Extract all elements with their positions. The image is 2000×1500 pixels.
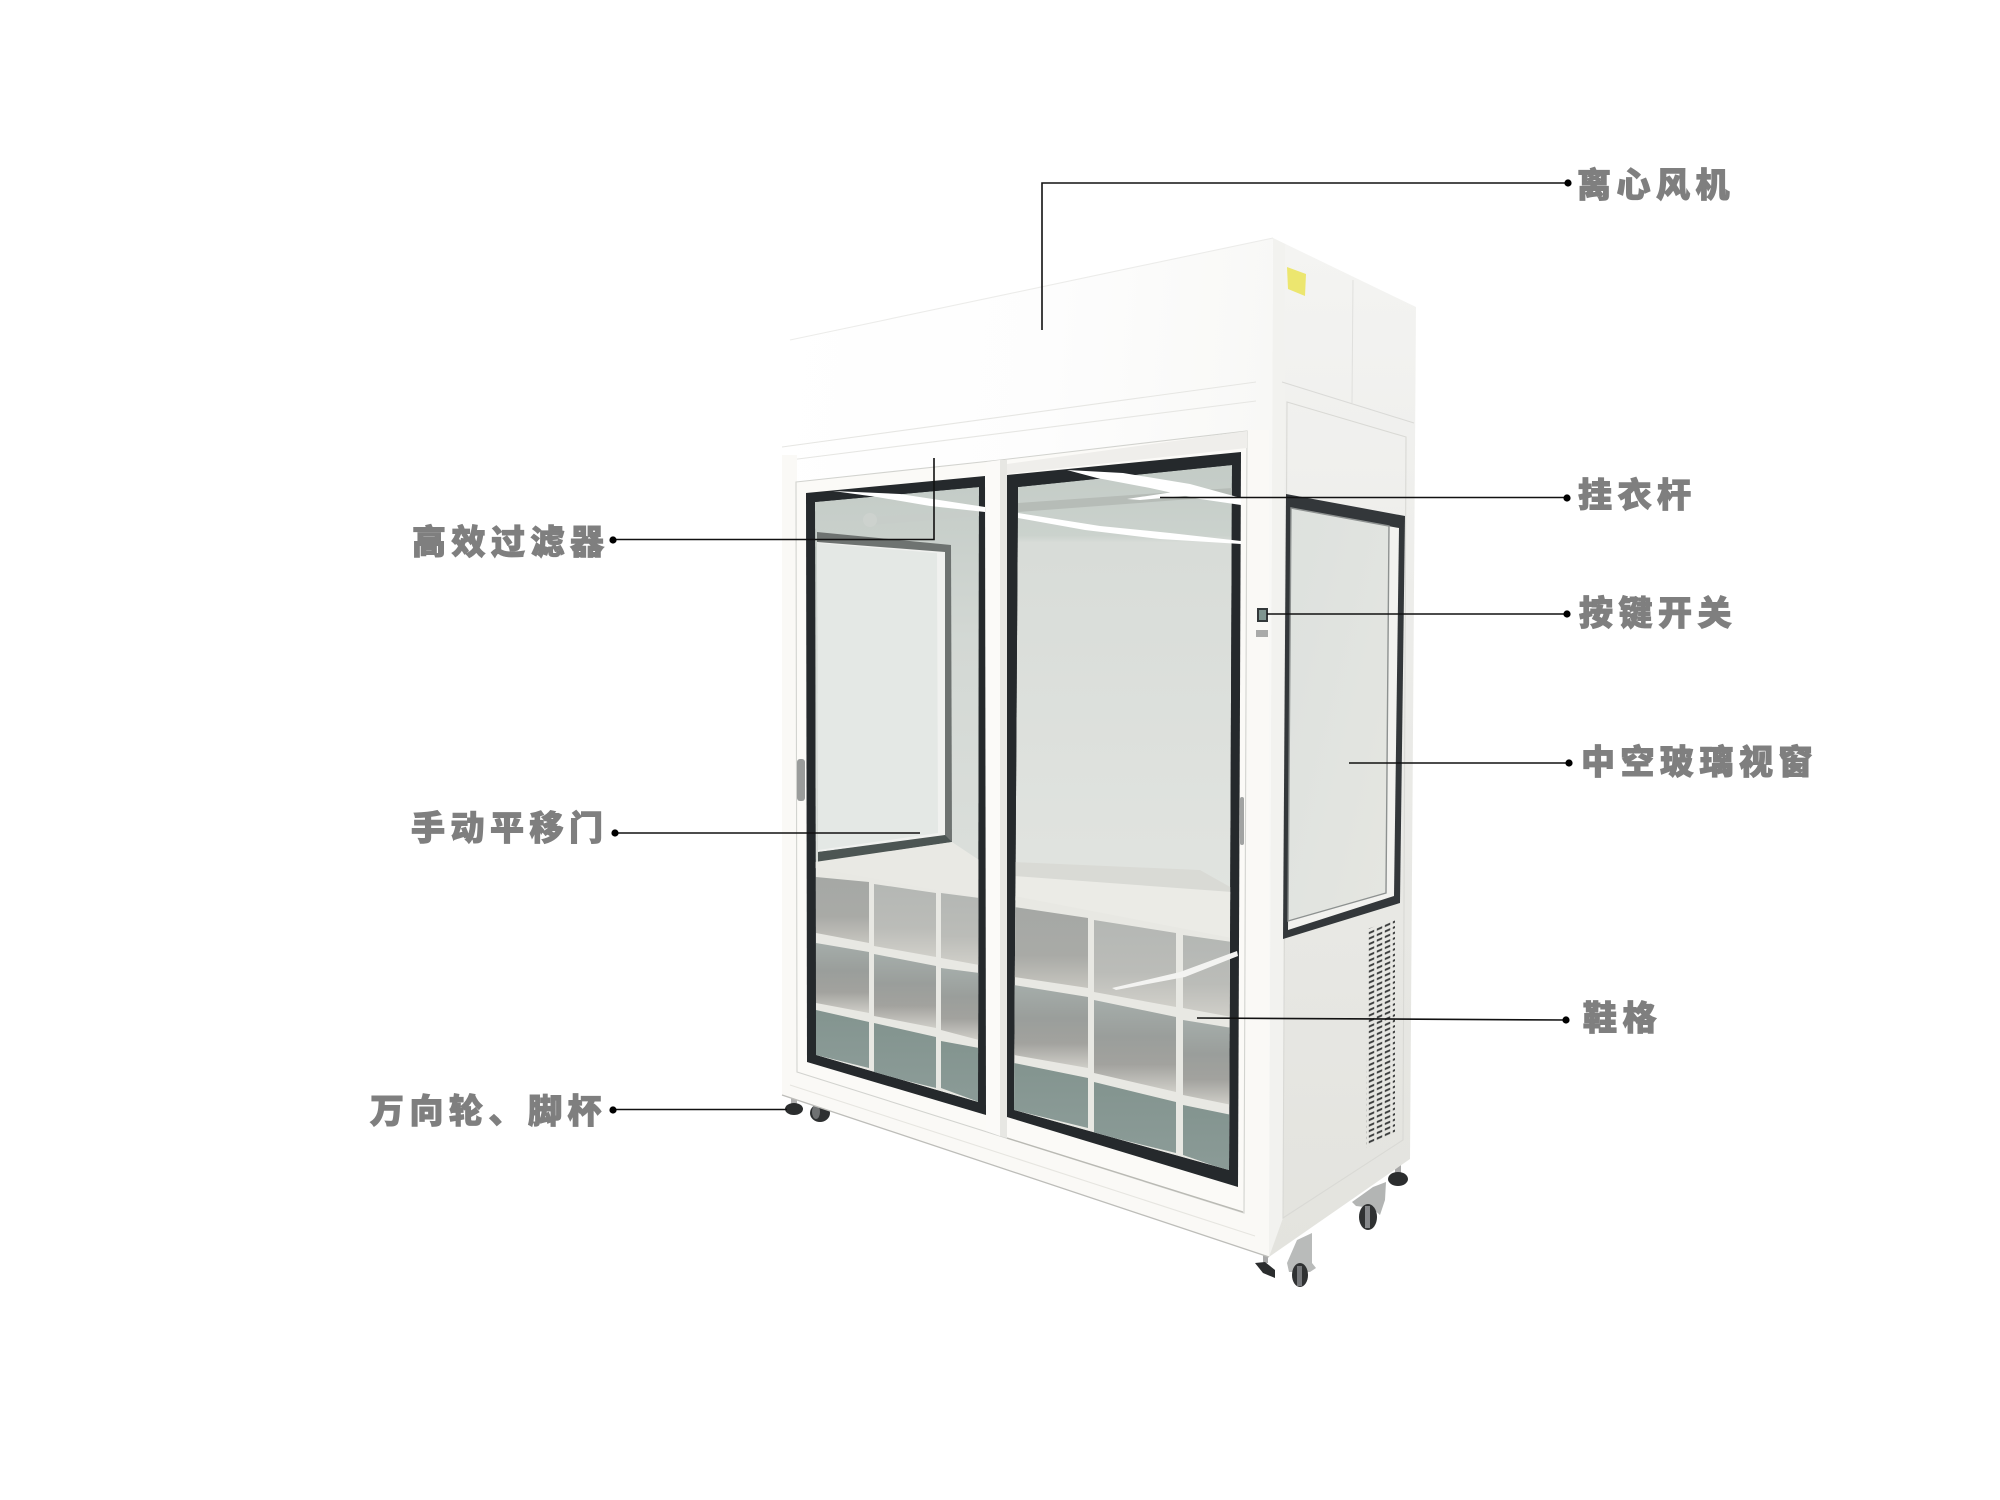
leader: button switch — [1267, 610, 1571, 618]
left door glare — [833, 491, 985, 512]
right door top glare — [1067, 470, 1241, 505]
caster: right wheel — [1352, 1182, 1386, 1230]
leader: shoe compartment — [1197, 1016, 1570, 1024]
shoe grid base — [1014, 896, 1232, 1172]
push-button switch — [1256, 608, 1268, 637]
label: HEPA filter: 高效过滤器 — [412, 524, 610, 562]
side window frame — [1283, 494, 1405, 939]
warning sticker — [1287, 267, 1306, 296]
cabinet product illustration — [782, 238, 1416, 1287]
foot: left glide — [785, 1098, 803, 1115]
door opening — [796, 431, 1247, 1213]
label: insulated glass window: 中空玻璃视窗 — [1581, 744, 1818, 782]
left door dark frame — [806, 476, 986, 1115]
foot: right glide — [1388, 1164, 1408, 1186]
leader: casters and feet — [609, 1106, 787, 1114]
shoe grid base — [816, 868, 979, 1102]
leader: manual sliding door — [611, 829, 920, 837]
caster: center wheel — [1287, 1233, 1316, 1287]
cabinet front face — [781, 238, 1273, 1257]
right door bottom rail — [1007, 1138, 1243, 1212]
label: button switch: 按键开关 — [1579, 595, 1737, 633]
right door glass — [1014, 465, 1232, 1172]
left door handle — [797, 759, 805, 801]
upper track band — [1007, 431, 1247, 474]
side window glass — [1288, 508, 1389, 921]
label: manual sliding door: 手动平移门 — [411, 810, 608, 848]
label: casters and feet: 万向轮、脚杯 — [370, 1093, 607, 1131]
left door glass — [815, 487, 980, 1102]
center door stile — [986, 460, 1007, 1138]
shelf glare — [1112, 951, 1238, 990]
left sliding door — [797, 476, 986, 1115]
side window bevel — [1288, 508, 1399, 930]
shelf surface — [815, 842, 979, 898]
foot: front glide — [1255, 1252, 1275, 1278]
vent holes — [1366, 920, 1395, 1148]
cabinet side face — [1269, 238, 1416, 1257]
label: centrifugal fan: 离心风机 — [1577, 167, 1735, 205]
leader: insulated glass window — [1349, 759, 1573, 767]
label: shoe compartment: 鞋格 — [1583, 1000, 1662, 1038]
right door handle — [1240, 797, 1244, 845]
hanging rod — [978, 512, 979, 516]
caster: left wheel — [810, 1104, 830, 1122]
rear window frame — [817, 532, 952, 862]
shelf top surface — [1014, 876, 1232, 942]
right door lower glare — [1018, 513, 1241, 544]
shoe cells — [816, 877, 979, 1102]
corner column — [1269, 238, 1285, 1257]
leader: hanging rod — [1160, 494, 1571, 502]
label: hanging rod: 挂衣杆 — [1578, 477, 1696, 515]
right door dark frame — [1007, 452, 1241, 1187]
casters and leveling feet — [785, 1098, 1408, 1287]
shelf back shadow — [1014, 862, 1232, 900]
leader: HEPA filter — [609, 458, 934, 544]
shoe cells — [1014, 907, 1232, 1172]
hook glare — [1127, 491, 1195, 500]
lower front rail — [782, 430, 1269, 1257]
right sliding door — [1007, 452, 1244, 1212]
hanging rod — [1018, 488, 1232, 512]
leader: centrifugal fan — [1042, 179, 1572, 330]
rear vent holes — [910, 858, 942, 868]
